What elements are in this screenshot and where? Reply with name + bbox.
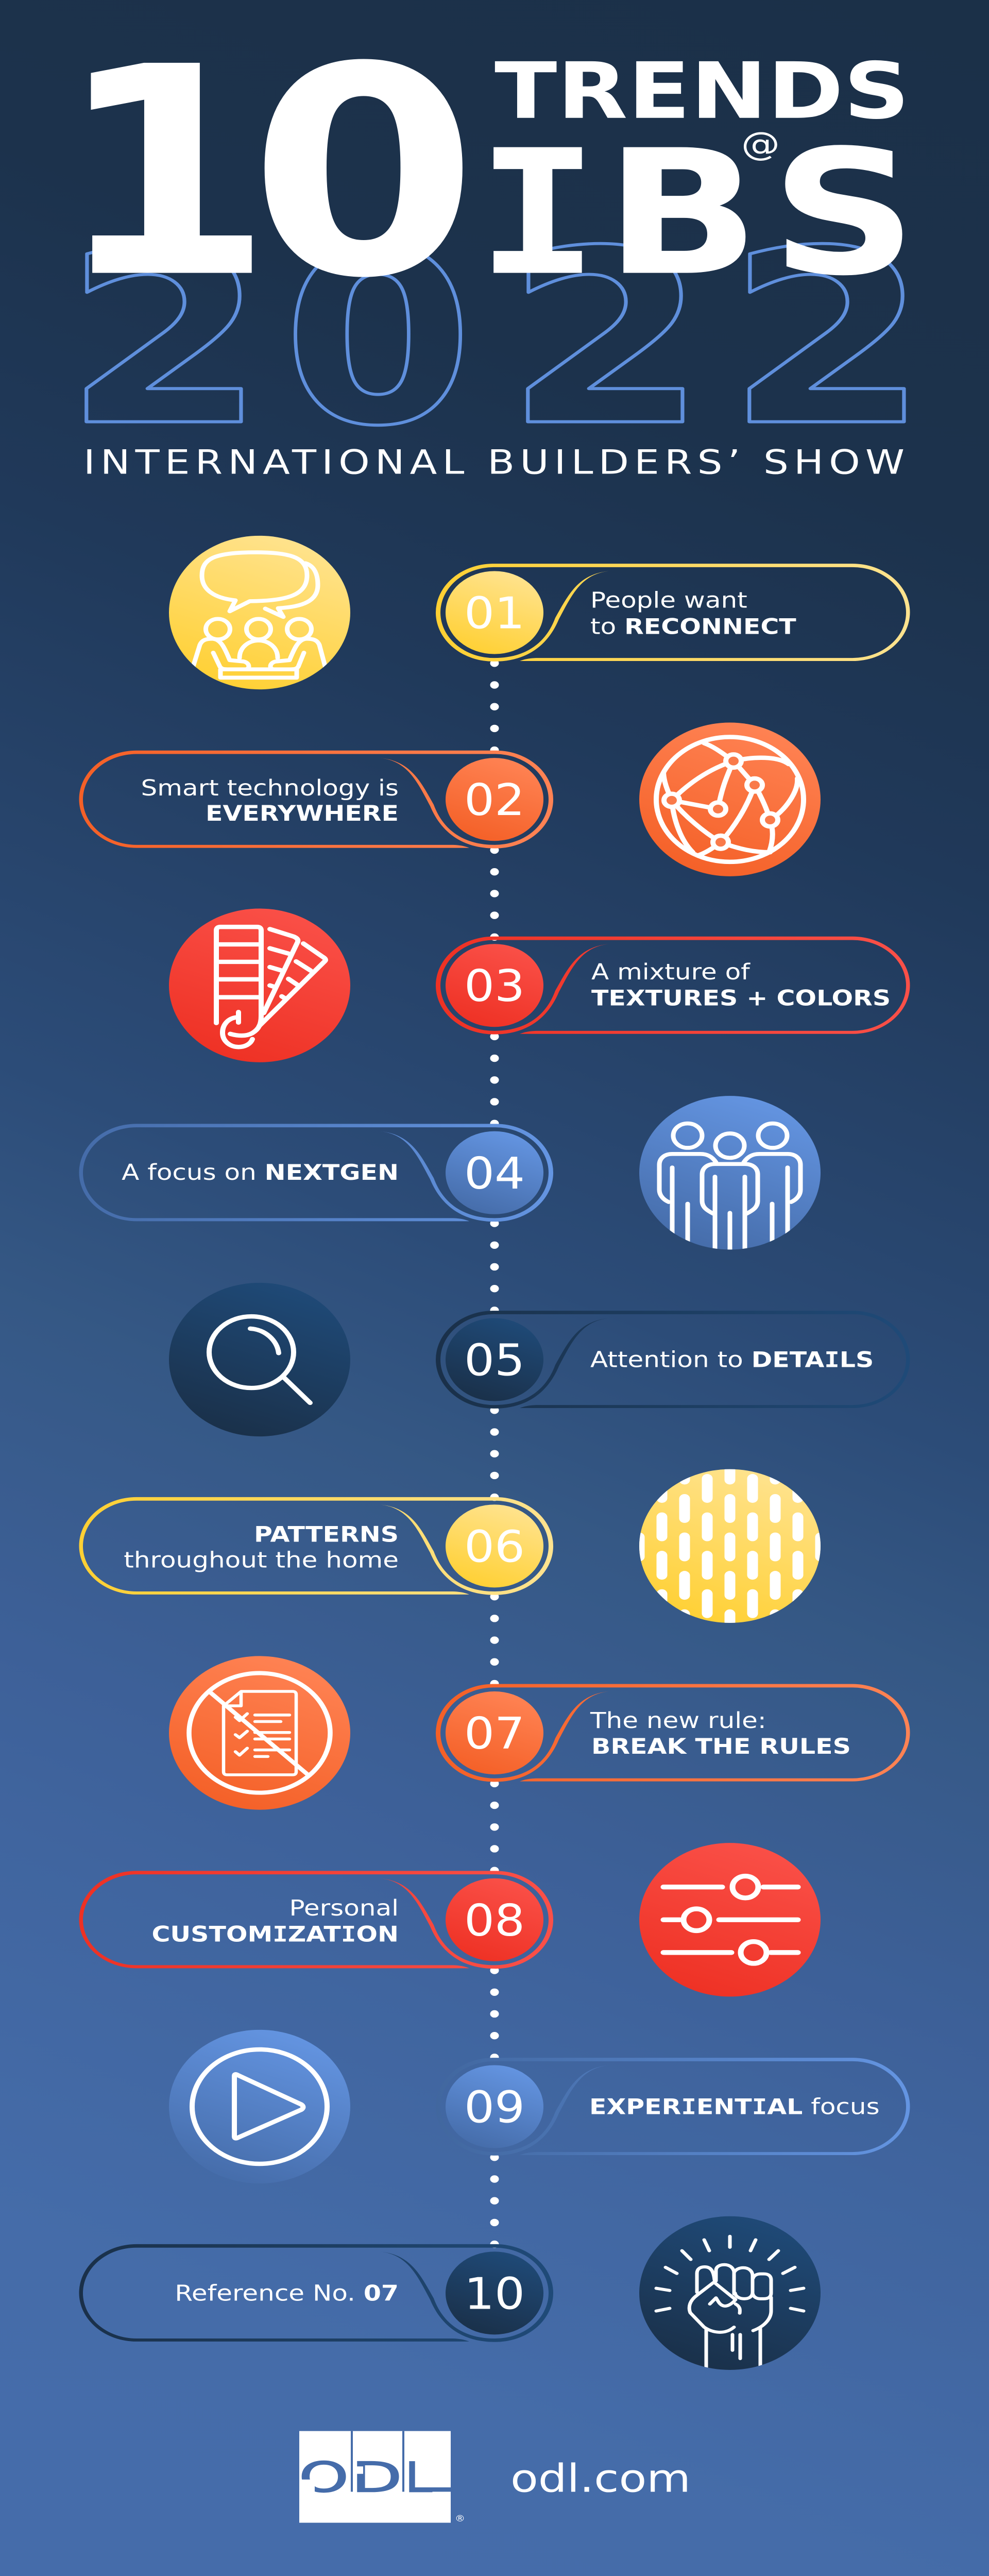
number badge 07: 07 — [464, 1708, 525, 1759]
icon: play button — [169, 2030, 350, 2183]
label 02: EVERYWHERE — [206, 801, 399, 826]
label 01: RECONNECT — [624, 614, 796, 639]
pill 06 — [79, 1497, 553, 1595]
footer logo: ODL: D — [351, 2454, 402, 2502]
number badge 05: 05 — [464, 1335, 525, 1386]
icon: group of people — [639, 1096, 821, 1253]
icon: prohibited checklist — [169, 1656, 350, 1810]
label 10: Reference No. 07 — [175, 2280, 399, 2306]
dotted connector — [490, 663, 499, 2245]
title: 10 Trends @ IBS: I — [476, 113, 599, 314]
title: 10 Trends @ IBS: @ — [741, 125, 780, 163]
number badge 07 — [446, 1691, 543, 1774]
pill 09 — [436, 2058, 910, 2156]
year outline 2022: 0 — [282, 199, 473, 479]
label 01: to — [590, 614, 624, 639]
label 06: throughout the home — [124, 1547, 399, 1572]
row 05: attention to details — [169, 1283, 910, 1436]
pill 05 — [436, 1311, 910, 1409]
year outline 2022: 2 — [63, 199, 266, 479]
number badge 05 — [446, 1318, 543, 1401]
title: 10 Trends @ IBS — [56, 5, 917, 341]
label 03: A mixture of — [591, 959, 750, 985]
year outline 2022: 2 — [505, 199, 708, 479]
icon: dash pattern — [639, 1469, 821, 1623]
number badge 09 — [446, 2065, 543, 2148]
row 07: break the rules — [169, 1656, 910, 1810]
number badge 02 — [446, 758, 543, 841]
footer logo: ODL: O — [299, 2453, 349, 2502]
title: 10 Trends @ IBS: 0 — [249, 5, 478, 341]
pill 10 — [79, 2244, 553, 2342]
label 07: BREAK THE RULES — [591, 1734, 851, 1759]
pill 01 — [436, 564, 910, 662]
row 10: reference no. 07 — [79, 2216, 821, 2371]
icon: raised fist — [639, 2216, 821, 2371]
number badge 03: 03 — [464, 961, 525, 1011]
number badge 01 — [446, 571, 543, 654]
number badge 06: 06 — [464, 1521, 525, 1572]
label 02: Smart technology is — [141, 775, 399, 801]
pill 04 — [79, 1124, 553, 1222]
row 02: smart technology is everywhere — [79, 723, 821, 876]
footer url: odl.com — [510, 2456, 691, 2501]
footer logo: ODL: ® — [455, 2514, 465, 2524]
title: 10 Trends @ IBS: B — [605, 113, 760, 314]
row 01: people want to reconnect — [169, 536, 910, 689]
footer logo: ODL: L — [405, 2453, 432, 2502]
year outline 2022 — [63, 199, 929, 479]
footer logo: ODL — [299, 2431, 465, 2524]
number badge 09: 09 — [464, 2082, 525, 2133]
icon: colour swatch fan — [169, 909, 350, 1062]
title: 10 Trends @ IBS: TRENDS — [494, 46, 910, 136]
label 09: EXPERIENTIAL focus — [589, 2094, 880, 2119]
icon: meeting with speech bubbles — [169, 536, 350, 689]
number badge 08: 08 — [464, 1895, 525, 1946]
number badge 04: 04 — [464, 1148, 525, 1199]
number badge 02: 02 — [464, 775, 525, 825]
icon: sliders — [639, 1843, 821, 1996]
number badge 10 — [446, 2251, 543, 2334]
number badge 04 — [446, 1131, 543, 1214]
title: 10 Trends @ IBS: S — [771, 113, 917, 314]
subtitle: INTERNATIONAL BUILDERS’ SHOW — [83, 443, 905, 482]
icon: magnifying glass — [169, 1283, 350, 1436]
label 06: PATTERNS — [254, 1522, 399, 1547]
number badge 10: 10 — [464, 2268, 525, 2319]
row 09: experiential focus — [169, 2030, 910, 2183]
label 08: Personal — [289, 1895, 399, 1921]
label 08: IZATION — [272, 1922, 399, 1947]
pill 02 — [79, 751, 553, 849]
pill 03 — [436, 937, 910, 1035]
pill 08 — [79, 1871, 553, 1969]
year outline 2022: 2 — [726, 199, 929, 479]
number badge 01: 01 — [464, 588, 525, 639]
label 03: TEXTURES + COLORS — [591, 986, 891, 1011]
label 04: A focus on NEXTGEN — [122, 1160, 399, 1185]
row 08: personal customization — [79, 1843, 821, 1996]
label 08: CUSTOM — [151, 1922, 272, 1947]
label 01: People want — [590, 587, 747, 613]
number badge 06 — [446, 1504, 543, 1587]
title: 10 Trends @ IBS: 1 — [56, 5, 274, 341]
row 04: focus on nextgen — [79, 1096, 821, 1253]
row 03: textures and colors — [169, 909, 910, 1062]
pill 07 — [436, 1684, 910, 1782]
row 06: patterns throughout the home — [79, 1469, 821, 1623]
number badge 03 — [446, 944, 543, 1027]
label 05: Attention to DETAILS — [590, 1347, 874, 1372]
number badge 08 — [446, 1878, 543, 1961]
icon: globe network — [639, 723, 821, 876]
label 07: The new rule: — [590, 1708, 766, 1733]
